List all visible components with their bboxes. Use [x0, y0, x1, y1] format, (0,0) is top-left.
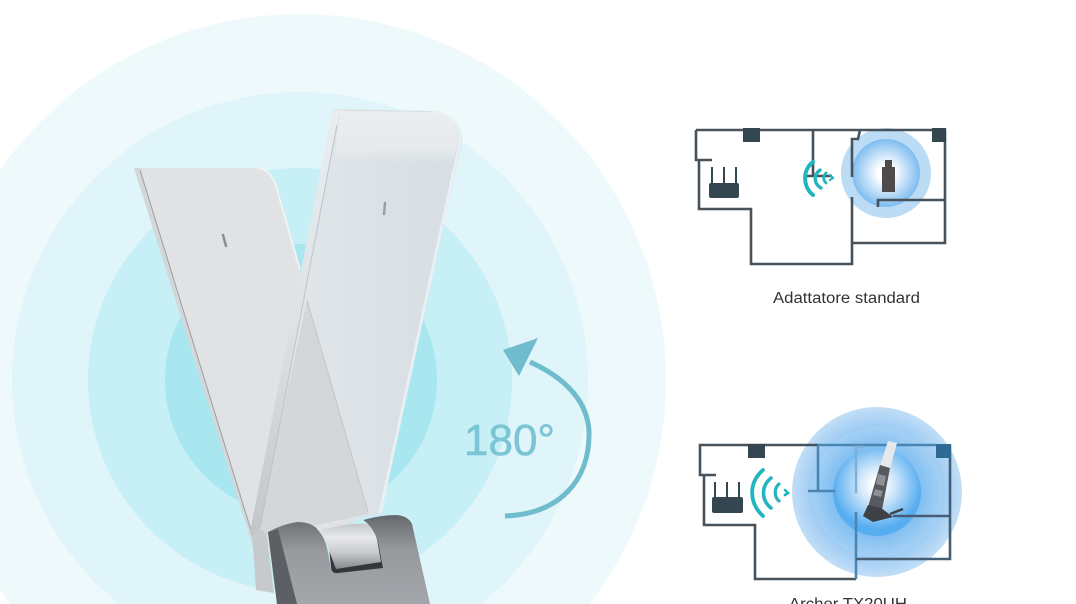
icon: strong wifi signal	[752, 470, 788, 516]
icon: weak wifi signal	[805, 162, 833, 195]
left antenna blade	[134, 168, 368, 593]
icon: router	[712, 482, 743, 513]
strong coverage circles	[792, 407, 962, 577]
icon: usb adapter	[882, 160, 895, 192]
left blade lower shadow	[252, 530, 274, 593]
diagram: Archer TX20UH	[700, 407, 962, 604]
right blade LED mark	[384, 203, 385, 214]
diagram: standard adapter	[696, 128, 946, 307]
left blade LED mark	[223, 235, 226, 246]
caption: Adattatore standard	[773, 290, 920, 307]
wall pillars	[748, 444, 951, 458]
weak coverage circles	[841, 128, 931, 218]
floor plan walls	[700, 445, 856, 579]
floor plan walls	[696, 130, 945, 264]
right antenna blade	[250, 109, 462, 535]
rotation arrow	[503, 338, 589, 516]
signal coverage circles	[0, 14, 666, 604]
wall pillars	[743, 128, 946, 142]
rotation label: 180°	[464, 416, 555, 465]
hinge and base of adapter	[268, 515, 430, 604]
icon: Archer TX20UH adapter on stand	[863, 441, 903, 522]
icon: router	[709, 167, 739, 198]
